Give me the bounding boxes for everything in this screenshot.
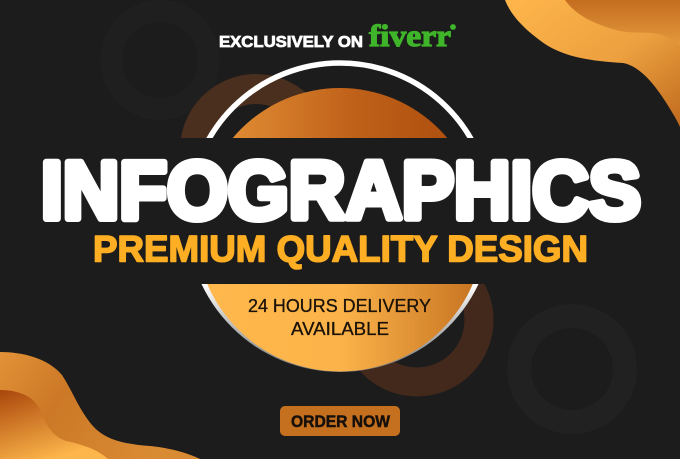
brown arc: top bbox=[181, 74, 306, 138]
order now button bbox=[280, 406, 400, 436]
top tagline: exclusively on fiverr bbox=[219, 18, 456, 53]
main title: INFOGRAPHICS bbox=[41, 146, 641, 236]
corner wave: top right bbox=[505, 0, 680, 127]
decorative faint ring: top left bbox=[111, 11, 209, 109]
delivery text: 24 HOURS DELIVERY bbox=[248, 296, 431, 316]
order now button: ORDER NOW bbox=[291, 413, 390, 431]
top tagline: exclusively on fiverr: EXCLUSIVELY ON bbox=[219, 34, 363, 51]
gold bowl: bottom bbox=[207, 284, 473, 372]
corner wave: bottom left bbox=[0, 352, 200, 459]
gold dome: top bbox=[232, 88, 448, 138]
subtitle: PREMIUM QUALITY DESIGN bbox=[93, 228, 588, 270]
white crescent: bottom bbox=[202, 284, 478, 372]
decorative faint ring: bottom right bbox=[519, 316, 625, 422]
white ring top arc bbox=[206, 60, 474, 138]
brown ring: bottom bbox=[355, 258, 479, 382]
delivery text bbox=[248, 296, 431, 339]
top tagline: exclusively on fiverr: fiverr bbox=[369, 18, 451, 53]
delivery text: AVAILABLE bbox=[291, 319, 389, 339]
